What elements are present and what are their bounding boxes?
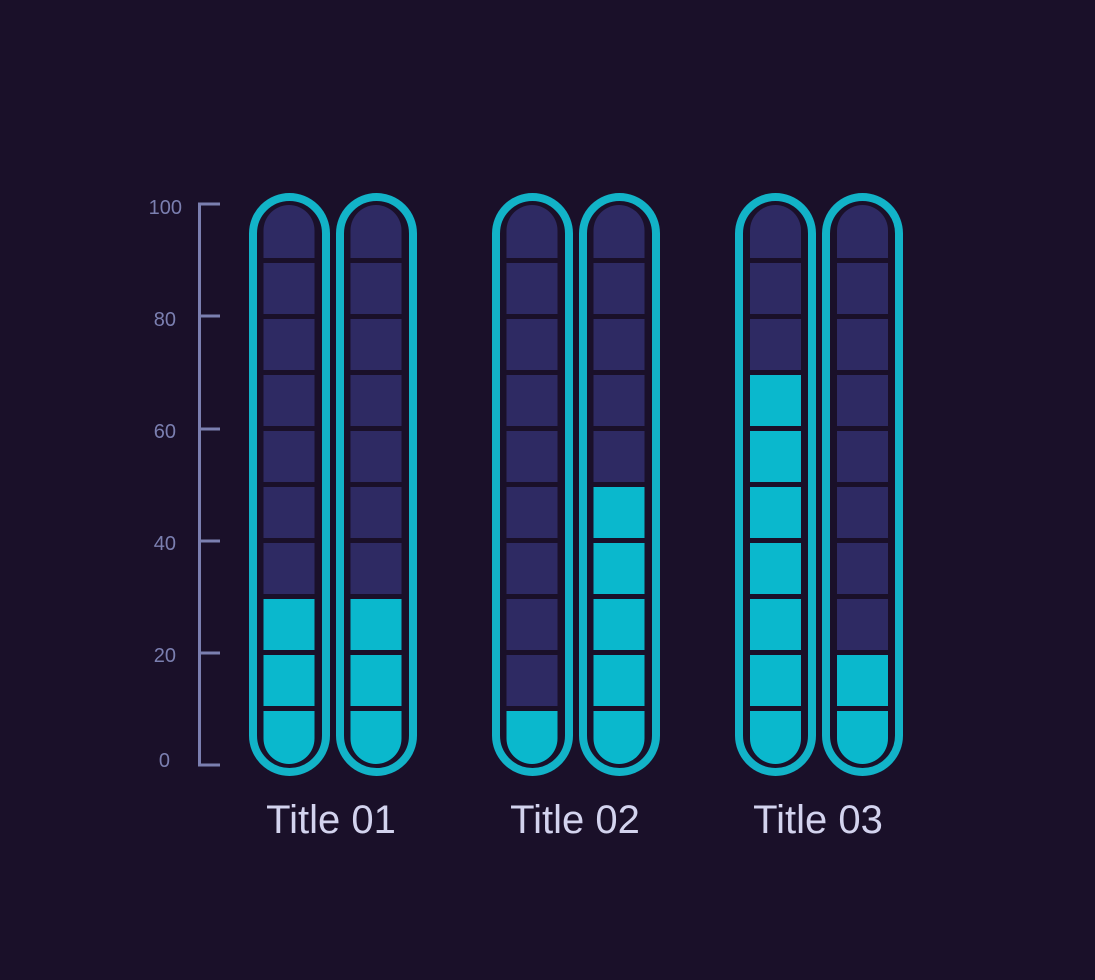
axis — [149, 197, 220, 772]
bar 3 (10) — [496, 197, 569, 772]
axis: 100 — [149, 197, 182, 219]
axis: 0 — [159, 750, 170, 772]
axis: 20 — [154, 645, 176, 667]
axis: 80 — [154, 309, 176, 331]
axis: 40 — [154, 533, 176, 555]
bar 6 (20) — [826, 197, 899, 772]
bar 2 (30) — [340, 197, 413, 772]
bar 5 (70) — [739, 197, 812, 772]
bar 1 (30) — [253, 197, 326, 772]
titles: Title 01 — [266, 798, 396, 842]
bar 4 (50) — [583, 197, 656, 772]
titles: Title 03 — [753, 798, 883, 842]
titles: Title 02 — [510, 798, 640, 842]
axis: 60 — [154, 421, 176, 443]
titles — [266, 798, 883, 842]
